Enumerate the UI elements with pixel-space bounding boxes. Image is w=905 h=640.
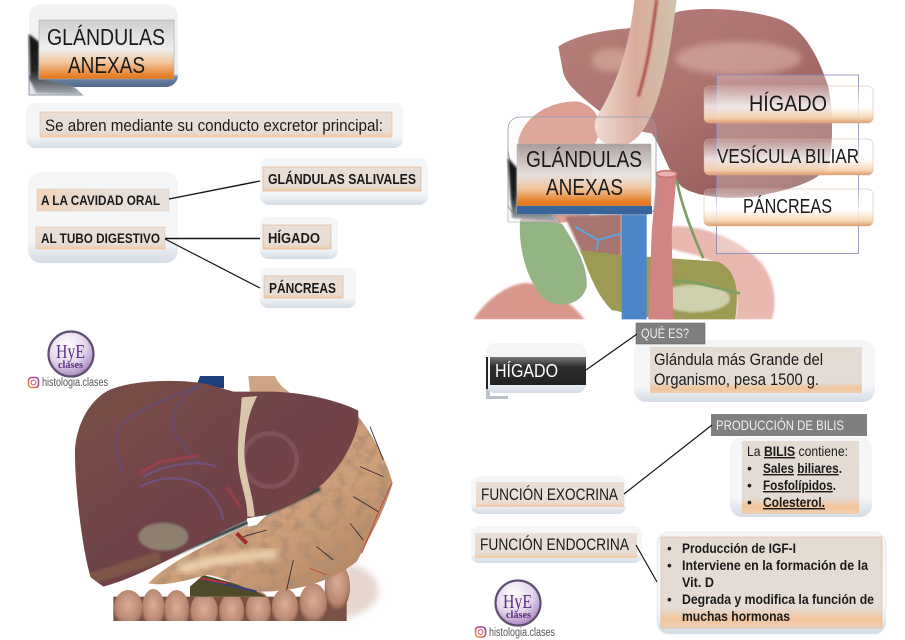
panel: bilis: • <box>747 494 752 510</box>
tag: qué es <box>636 323 705 344</box>
organ: esophagus top <box>248 376 290 393</box>
box: páncreas <box>260 268 356 308</box>
panel: funciones endocrinas: Degrada y modifica la función de <box>682 592 874 607</box>
detail: liver vessels <box>87 385 297 580</box>
label: al tubo digestivo: AL TUBO DIGESTIVO <box>41 230 160 246</box>
label: vesícula biliar <box>704 139 873 175</box>
translucent panel <box>716 75 858 254</box>
box: función exocrina <box>471 476 626 514</box>
panel: bilis: Fosfolípidos. <box>763 477 836 493</box>
box: función exocrina: FUNCIÓN EXOCRINA <box>481 485 618 504</box>
text block: conducto excretor <box>26 103 403 148</box>
box: hígado heading <box>486 343 586 399</box>
organ: intestines <box>113 569 350 621</box>
panel: definición: Organismo, pesa 1500 g. <box>654 371 819 389</box>
logo: HyE clases (right): clases <box>506 609 532 621</box>
box: glándulas salivales <box>260 158 428 205</box>
connector: función exocrina to producción de bilis <box>624 425 712 494</box>
texture: stomach mottling <box>148 417 393 592</box>
title: glándulas anexas: GLÁNDULAS <box>47 24 165 50</box>
detail: pancreas pale area <box>660 284 730 312</box>
panel: definición: Glándula más Grande del <box>654 351 823 369</box>
label: páncreas: PÁNCREAS <box>743 195 832 218</box>
panel: funciones endocrinas <box>657 532 886 634</box>
illustration: digestive organs <box>473 0 832 320</box>
box: hígado: HÍGADO <box>268 230 320 247</box>
organ: stomach <box>518 102 600 227</box>
title: glándulas anexas: ANEXAS <box>68 52 145 78</box>
organ: pancreas <box>580 250 737 320</box>
fade: intestine right edge <box>340 563 378 618</box>
illustration: liver and stomach <box>75 376 393 630</box>
title: glándulas anexas <box>29 4 178 95</box>
instagram handle (right) <box>476 627 555 639</box>
detail: gap below ligament <box>247 515 267 527</box>
organ: liver <box>75 381 358 587</box>
panel: funciones endocrinas: • <box>667 541 672 556</box>
label: al tubo digestivo <box>36 227 165 249</box>
label: hígado: HÍGADO <box>749 91 827 116</box>
title overlay: glándulas anexas: GLÁNDULAS <box>526 146 642 172</box>
organ: duodenum <box>662 226 775 320</box>
instagram handle (left) <box>28 377 108 389</box>
panel: definición <box>634 340 875 402</box>
title overlay: glándulas anexas: ANEXAS <box>546 174 623 200</box>
panel: destinos <box>28 172 178 263</box>
connector: función endocrina to list <box>636 545 657 582</box>
organ: gallbladder <box>520 220 587 305</box>
label: a la cavidad oral: A LA CAVIDAD ORAL <box>41 192 160 208</box>
vessel: aorta <box>648 173 677 320</box>
organ: liver <box>558 9 832 198</box>
logo: HyE clases (right) <box>496 580 540 626</box>
label: a la cavidad oral <box>37 189 169 211</box>
shadow: under liver <box>140 488 320 568</box>
organ: esophagus <box>595 0 677 147</box>
detail: esophagus streak <box>638 0 657 97</box>
box: función endocrina <box>471 526 642 563</box>
title overlay: glándulas anexas <box>508 117 656 222</box>
detail: mesentery under stomach <box>190 575 267 597</box>
tag: producción de bilis: PRODUCCIÓN DE BILIS <box>716 417 844 433</box>
detail: stomach vessels <box>200 427 392 592</box>
panel: funciones endocrinas: muchas hormonas <box>682 609 790 624</box>
tag: producción de bilis <box>711 414 867 436</box>
panel: bilis: Sales biliares. <box>763 460 842 476</box>
connector: hígado to qué es <box>586 334 637 370</box>
panel: bilis <box>730 437 872 517</box>
label: páncreas <box>704 189 873 226</box>
panel: bilis: La BILIS contiene: <box>747 443 848 459</box>
vessel: vena cava <box>622 210 647 320</box>
vessel: bile duct <box>672 180 740 293</box>
box: hígado heading: HÍGADO <box>495 361 558 381</box>
logo: HyE clases (left) <box>48 332 94 376</box>
highlight: stomach <box>180 553 277 570</box>
panel: bilis: • <box>747 477 752 493</box>
box: páncreas: PÁNCREAS <box>269 280 336 297</box>
panel: bilis: Colesterol. <box>763 494 825 510</box>
detail: falciform ligament <box>238 396 257 517</box>
logo: HyE clases (left): clases <box>58 359 84 371</box>
instagram handle (left): histologia.clases <box>42 377 108 389</box>
connector lines <box>165 181 260 288</box>
organ: stomach <box>148 417 393 592</box>
logo: HyE clases (left): HyE <box>56 341 85 363</box>
detail: gallbladder shadow <box>138 523 188 551</box>
highlight: liver texture <box>592 42 802 75</box>
text block: conducto excretor: Se abren mediante su conducto excretor principal: <box>45 116 383 135</box>
box: hígado <box>260 217 338 259</box>
panel: funciones endocrinas: Producción de IGF-I <box>682 541 796 556</box>
panel: funciones endocrinas: • <box>667 558 672 573</box>
detail: central vessels <box>565 213 622 257</box>
panel: overlay labels <box>704 75 873 254</box>
label: hígado <box>704 86 873 123</box>
panel: funciones endocrinas: Vit. D <box>682 575 714 590</box>
panel: glándulas anexas overview <box>26 4 428 308</box>
panel: funciones endocrinas: • <box>667 592 672 607</box>
box: glándulas salivales: GLÁNDULAS SALIVALES <box>268 171 416 188</box>
vessel: top blue <box>197 376 224 388</box>
tag: qué es: QUÉ ES? <box>641 325 689 341</box>
label: vesícula biliar: VESÍCULA BILIAR <box>717 145 859 168</box>
instagram handle (right): histologia.clases <box>489 627 555 639</box>
panel: funciones endocrinas: Interviene en la formación de la <box>682 558 868 573</box>
logo: HyE clases (right): HyE <box>503 591 532 613</box>
box: función endocrina: FUNCIÓN ENDOCRINA <box>480 535 629 554</box>
panel: bilis: • <box>747 460 752 476</box>
organ: lower left bowel <box>473 283 585 320</box>
